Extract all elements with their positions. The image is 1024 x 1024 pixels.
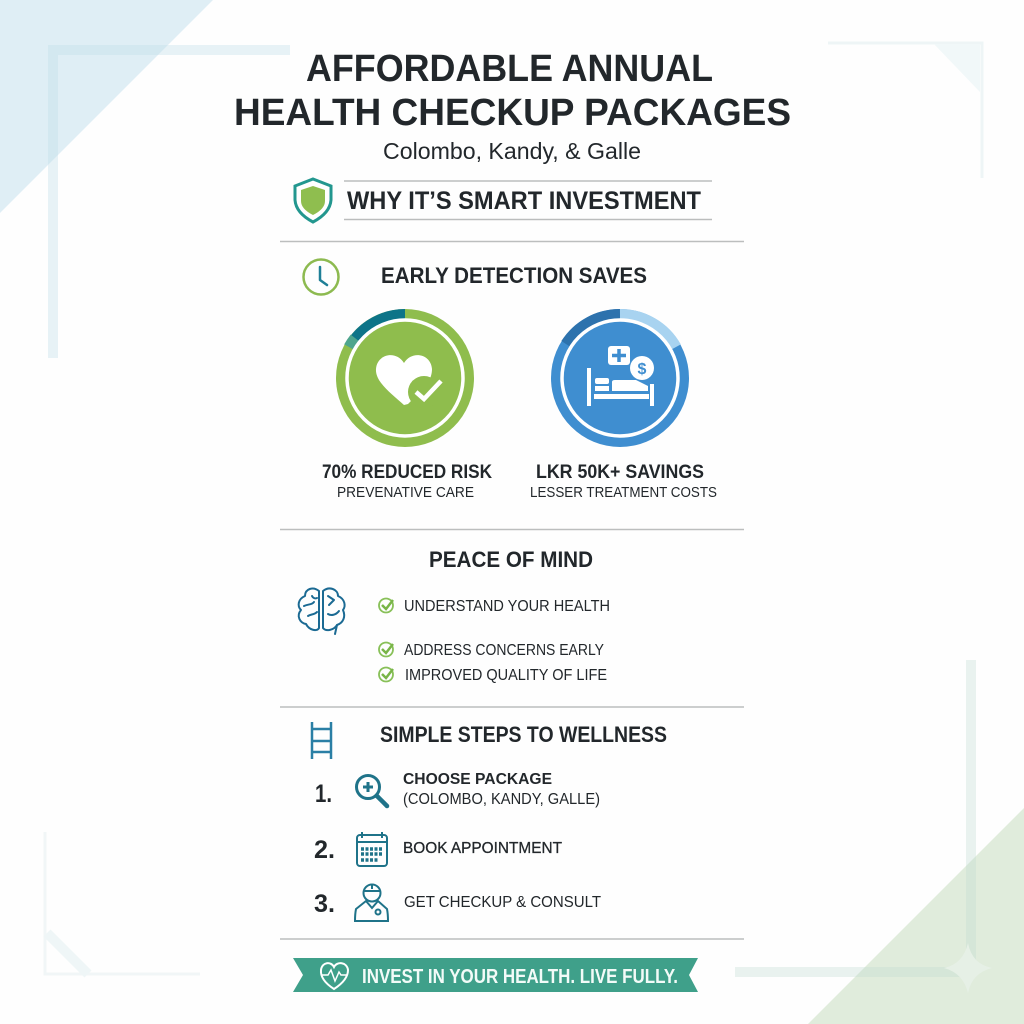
background corner: top-right frame (828, 43, 982, 178)
step 1: 1. (315, 780, 332, 808)
stat label: savings (530, 462, 717, 501)
background corner: top-left triangle and frame (0, 0, 290, 358)
checklist: peace of mind items (379, 598, 610, 684)
checklist: peace of mind items: UNDERSTAND YOUR HEALTH (404, 598, 610, 615)
stat circle: savings bed: $ (638, 361, 647, 378)
title: HEALTH CHECKUP PACKAGES (234, 92, 791, 134)
stat label: savings: LESSER TREATMENT COSTS (530, 484, 717, 501)
step 1 (315, 771, 600, 808)
subtitle: Colombo, Kandy, & Galle (383, 138, 641, 164)
heading: peace of mind: PEACE OF MIND (429, 547, 593, 572)
step 2: 2. (314, 836, 335, 864)
step 1: CHOOSE PACKAGE (403, 771, 552, 788)
stat label: reduced risk: 70% REDUCED RISK (322, 462, 492, 483)
heading: early detection saves: EARLY DETECTION SAVES (381, 263, 647, 288)
heading: simple steps: SIMPLE STEPS TO WELLNESS (380, 722, 667, 747)
stat circle: savings bed (551, 309, 689, 447)
icon: ladder (312, 722, 331, 759)
icon: heart with pulse (321, 963, 348, 989)
icon: shield (295, 179, 331, 222)
banner: INVEST IN YOUR HEALTH. LIVE FULLY. (362, 966, 678, 988)
stat circle: reduced risk heart (336, 309, 474, 447)
step 1: (COLOMBO, KANDY, GALLE) (403, 791, 600, 808)
icon: brain (299, 589, 345, 634)
background corner: bottom-left frame (45, 832, 200, 974)
checklist: peace of mind items: ADDRESS CONCERNS EARLY (404, 642, 604, 659)
step 3: GET CHECKUP & CONSULT (404, 894, 601, 911)
step 2: BOOK APPOINTMENT (403, 840, 562, 857)
checklist: peace of mind items: IMPROVED QUALITY OF LIFE (405, 667, 607, 684)
title (234, 48, 791, 134)
title: AFFORDABLE ANNUAL (306, 48, 713, 90)
heading: why it's smart investment: WHY IT’S SMART INVESTMENT (347, 187, 701, 215)
stat label: reduced risk (322, 462, 492, 501)
icon: clock (304, 260, 338, 294)
step 2 (314, 832, 562, 866)
background corner: bottom-right triangle, frame and star (735, 660, 1024, 1024)
stat label: savings: LKR 50K+ SAVINGS (536, 462, 704, 483)
step 3 (314, 884, 601, 921)
banner (293, 958, 698, 992)
step 3: 3. (314, 890, 335, 918)
stat label: reduced risk: PREVENATIVE CARE (337, 484, 474, 501)
